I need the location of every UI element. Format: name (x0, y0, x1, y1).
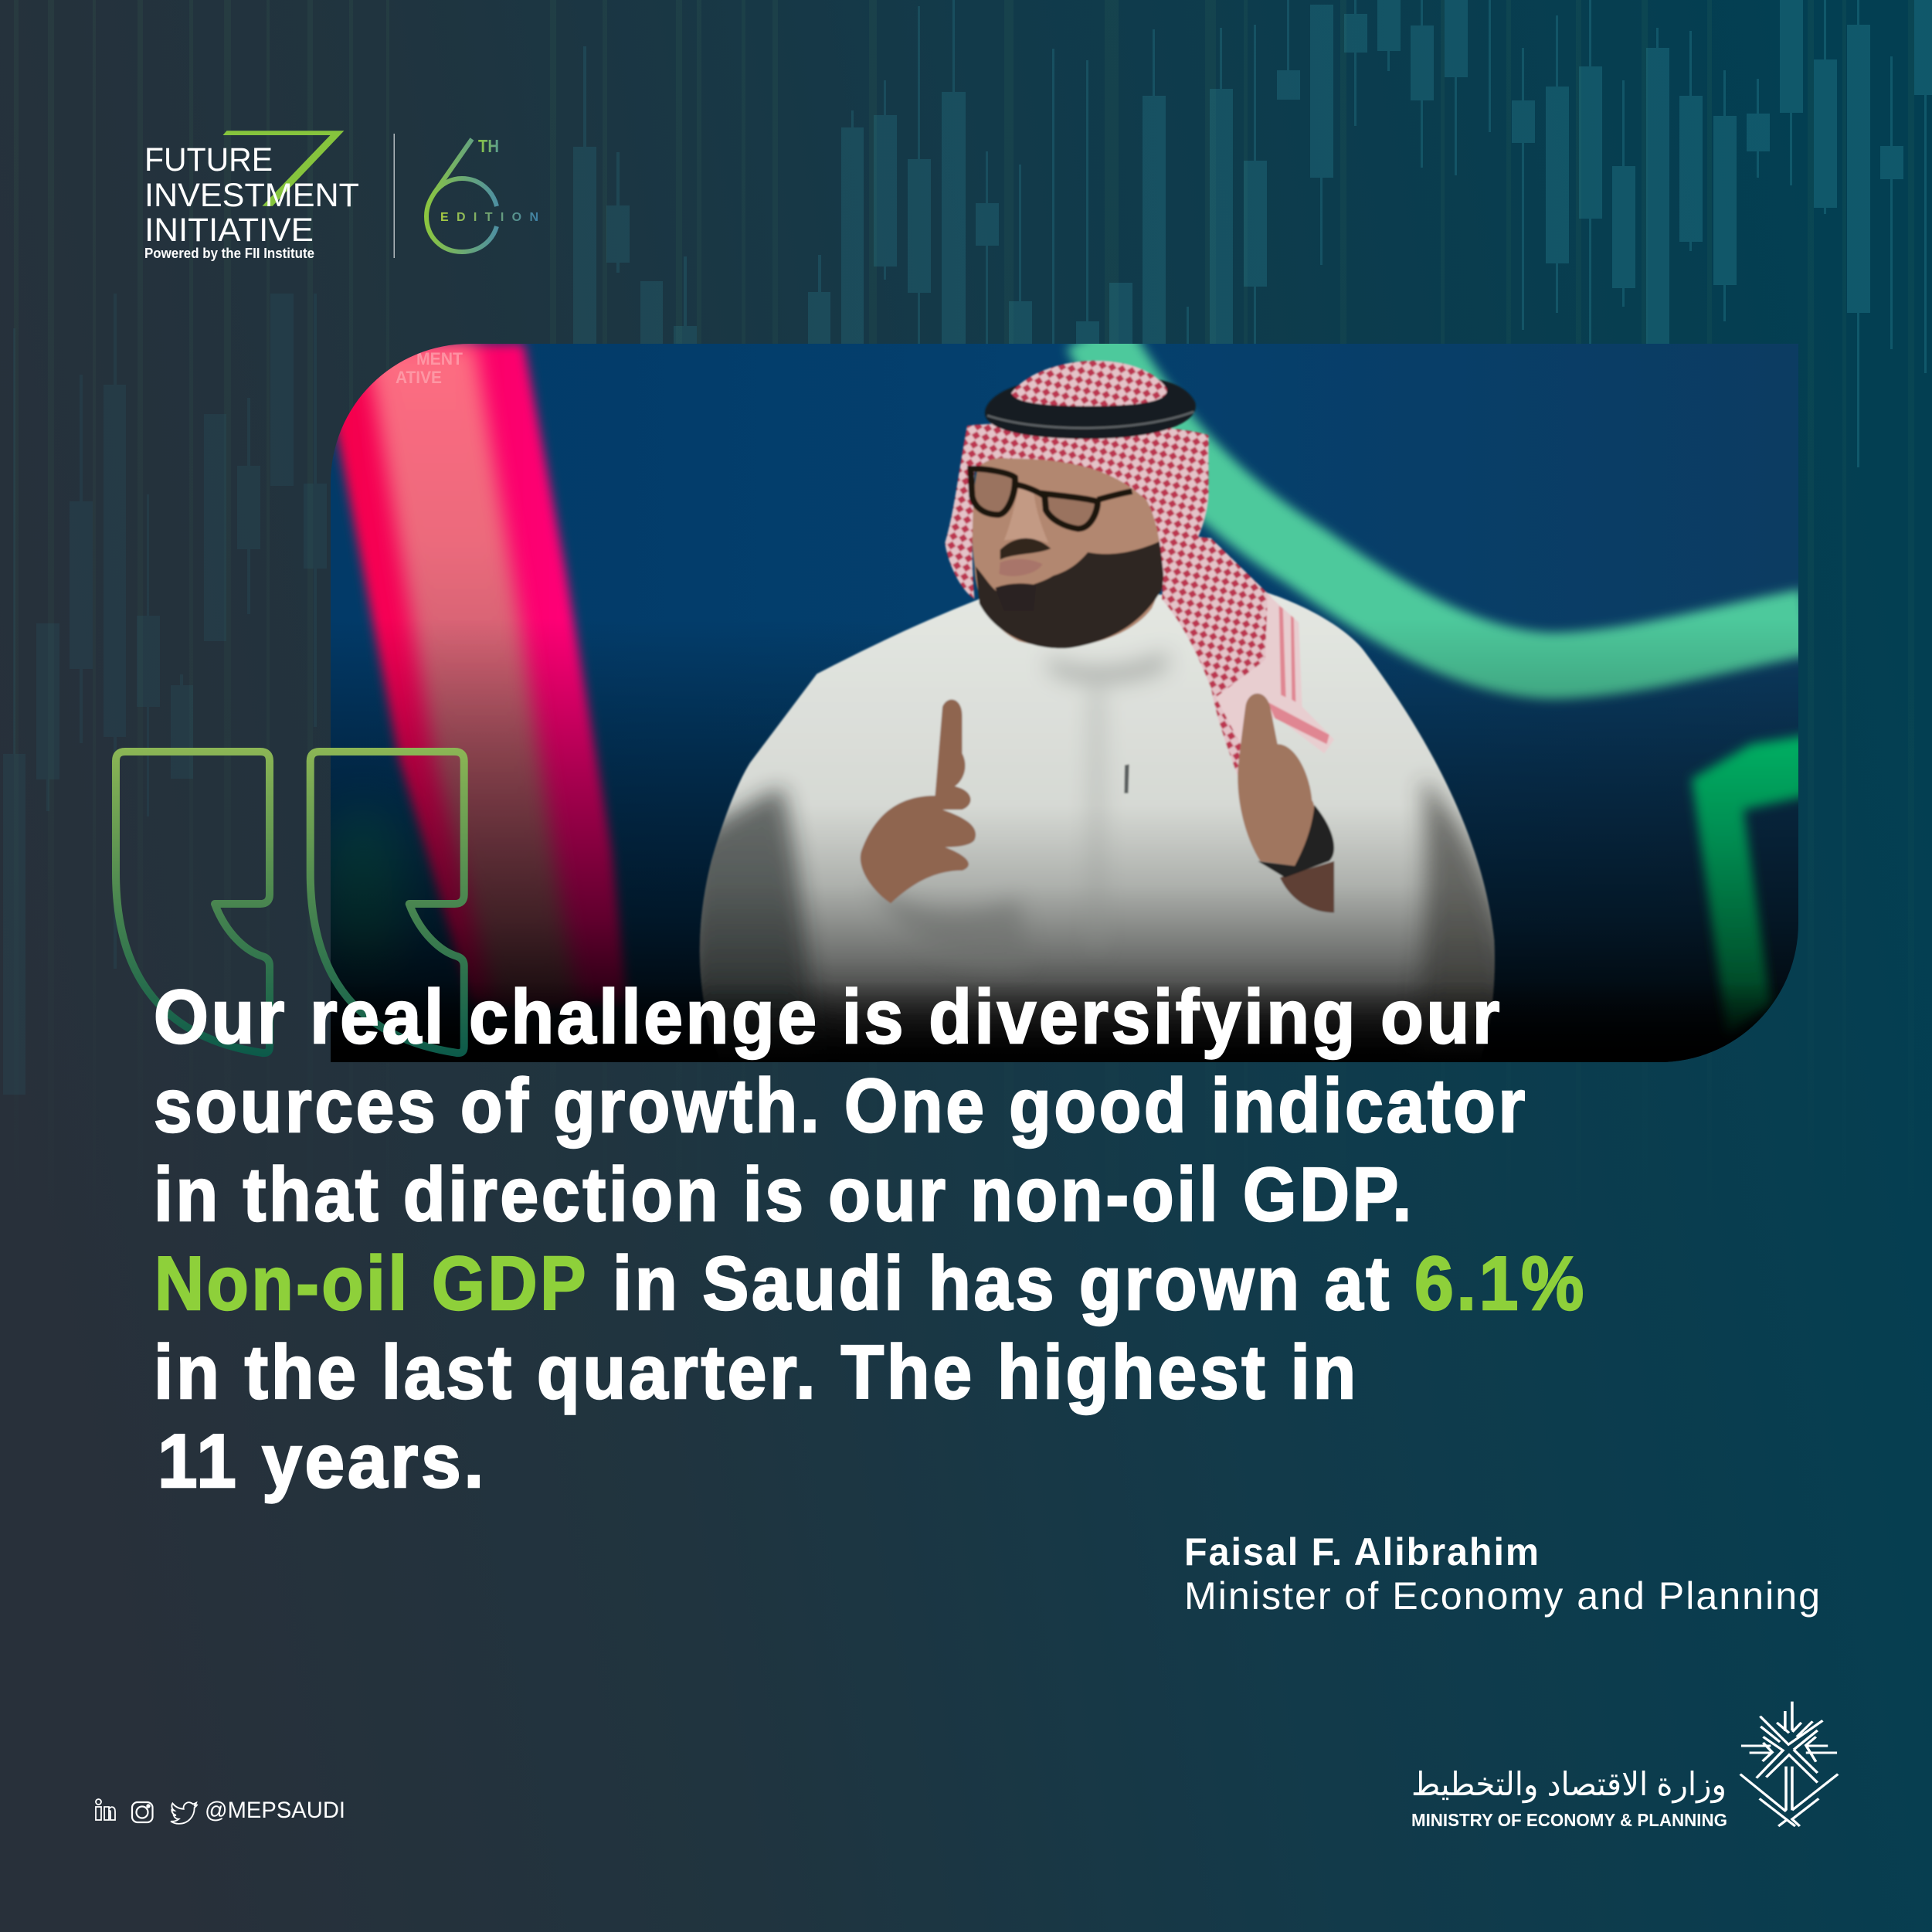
candlesticks: left side (3, 294, 327, 1095)
agal headband (985, 376, 1196, 439)
icon: quotation marks (116, 752, 464, 1053)
main quote text: in that direction is our non-oil GDP. (154, 1152, 1414, 1237)
left hand (861, 700, 976, 903)
right forearm (1280, 861, 1334, 912)
main quote text: Our real challenge is diversifying our (154, 974, 1502, 1059)
lips (999, 559, 1043, 576)
thobe shading (689, 650, 1506, 1067)
glasses (970, 469, 1132, 529)
highlighted figure line: Non-oil GDP (154, 1241, 589, 1326)
wordmark: Powered by the FII Institute (144, 245, 314, 261)
FII logo (144, 131, 359, 261)
speaker figure (689, 361, 1506, 1067)
arabic name: وزارة الاقتصاد والتخطيط (1411, 1766, 1727, 1803)
nose shade (1004, 487, 1048, 543)
emblem (1740, 1702, 1838, 1826)
edition label: EDITION (440, 211, 538, 224)
attribution (1184, 1530, 1822, 1618)
wordmark: INITIATIVE (144, 212, 314, 249)
icon: instagram (132, 1802, 153, 1822)
highlighted figure line (154, 1241, 1587, 1326)
TH superscript: TH (478, 136, 499, 156)
ministry logo (1411, 1702, 1838, 1830)
wordmark (144, 141, 359, 261)
ghutra crown (1011, 361, 1167, 406)
6th edition logo (394, 134, 538, 258)
pen in pocket (1124, 764, 1129, 793)
ghutra over head (945, 423, 1208, 601)
pink light column: ATIVE (396, 368, 442, 387)
green frame (1692, 735, 1808, 1035)
wordmark: FUTURE (144, 141, 273, 178)
attribution: Minister of Economy and Planning (1184, 1574, 1822, 1618)
panel: photo of the speaker (317, 332, 1808, 1067)
main quote text: 11 years. (158, 1418, 487, 1503)
highlighted figure line: 6.1% (1414, 1241, 1587, 1326)
icon: twitter (171, 1802, 197, 1824)
beard (976, 538, 1166, 648)
pink light column: MENT (416, 349, 463, 368)
thobe (700, 592, 1495, 1067)
green glow low left (331, 810, 411, 955)
pink light column (317, 344, 627, 1004)
numeral six (426, 139, 497, 252)
highlighted figure line: in Saudi has grown at (613, 1241, 1392, 1326)
goatee (995, 583, 1036, 611)
ghutra tail (1162, 534, 1271, 777)
main quote text: in the last quarter. The highest in (154, 1329, 1359, 1414)
wordmark: INVESTMENT (144, 177, 359, 214)
main quote text: sources of growth. One good indicator (154, 1063, 1528, 1148)
green seven (222, 131, 344, 206)
attribution: Faisal F. Alibrahim (1184, 1530, 1540, 1574)
english name: MINISTRY OF ECONOMY & PLANNING (1411, 1810, 1727, 1830)
right hand (1238, 694, 1315, 866)
ghutra tail stripes (1216, 594, 1334, 753)
photo backdrop (331, 344, 1798, 989)
photo shade (331, 344, 1798, 1062)
social handle (96, 1798, 345, 1824)
icon: linkedin (96, 1799, 115, 1820)
handle text: @MEPSAUDI (205, 1798, 345, 1823)
wrist watch (1258, 805, 1334, 878)
face (972, 455, 1170, 647)
candlesticks: top (573, 0, 1932, 467)
main quote text (154, 974, 1587, 1503)
mint ribbon (1095, 332, 1808, 666)
bottom fade (331, 981, 1798, 1062)
moustache (1000, 538, 1051, 560)
